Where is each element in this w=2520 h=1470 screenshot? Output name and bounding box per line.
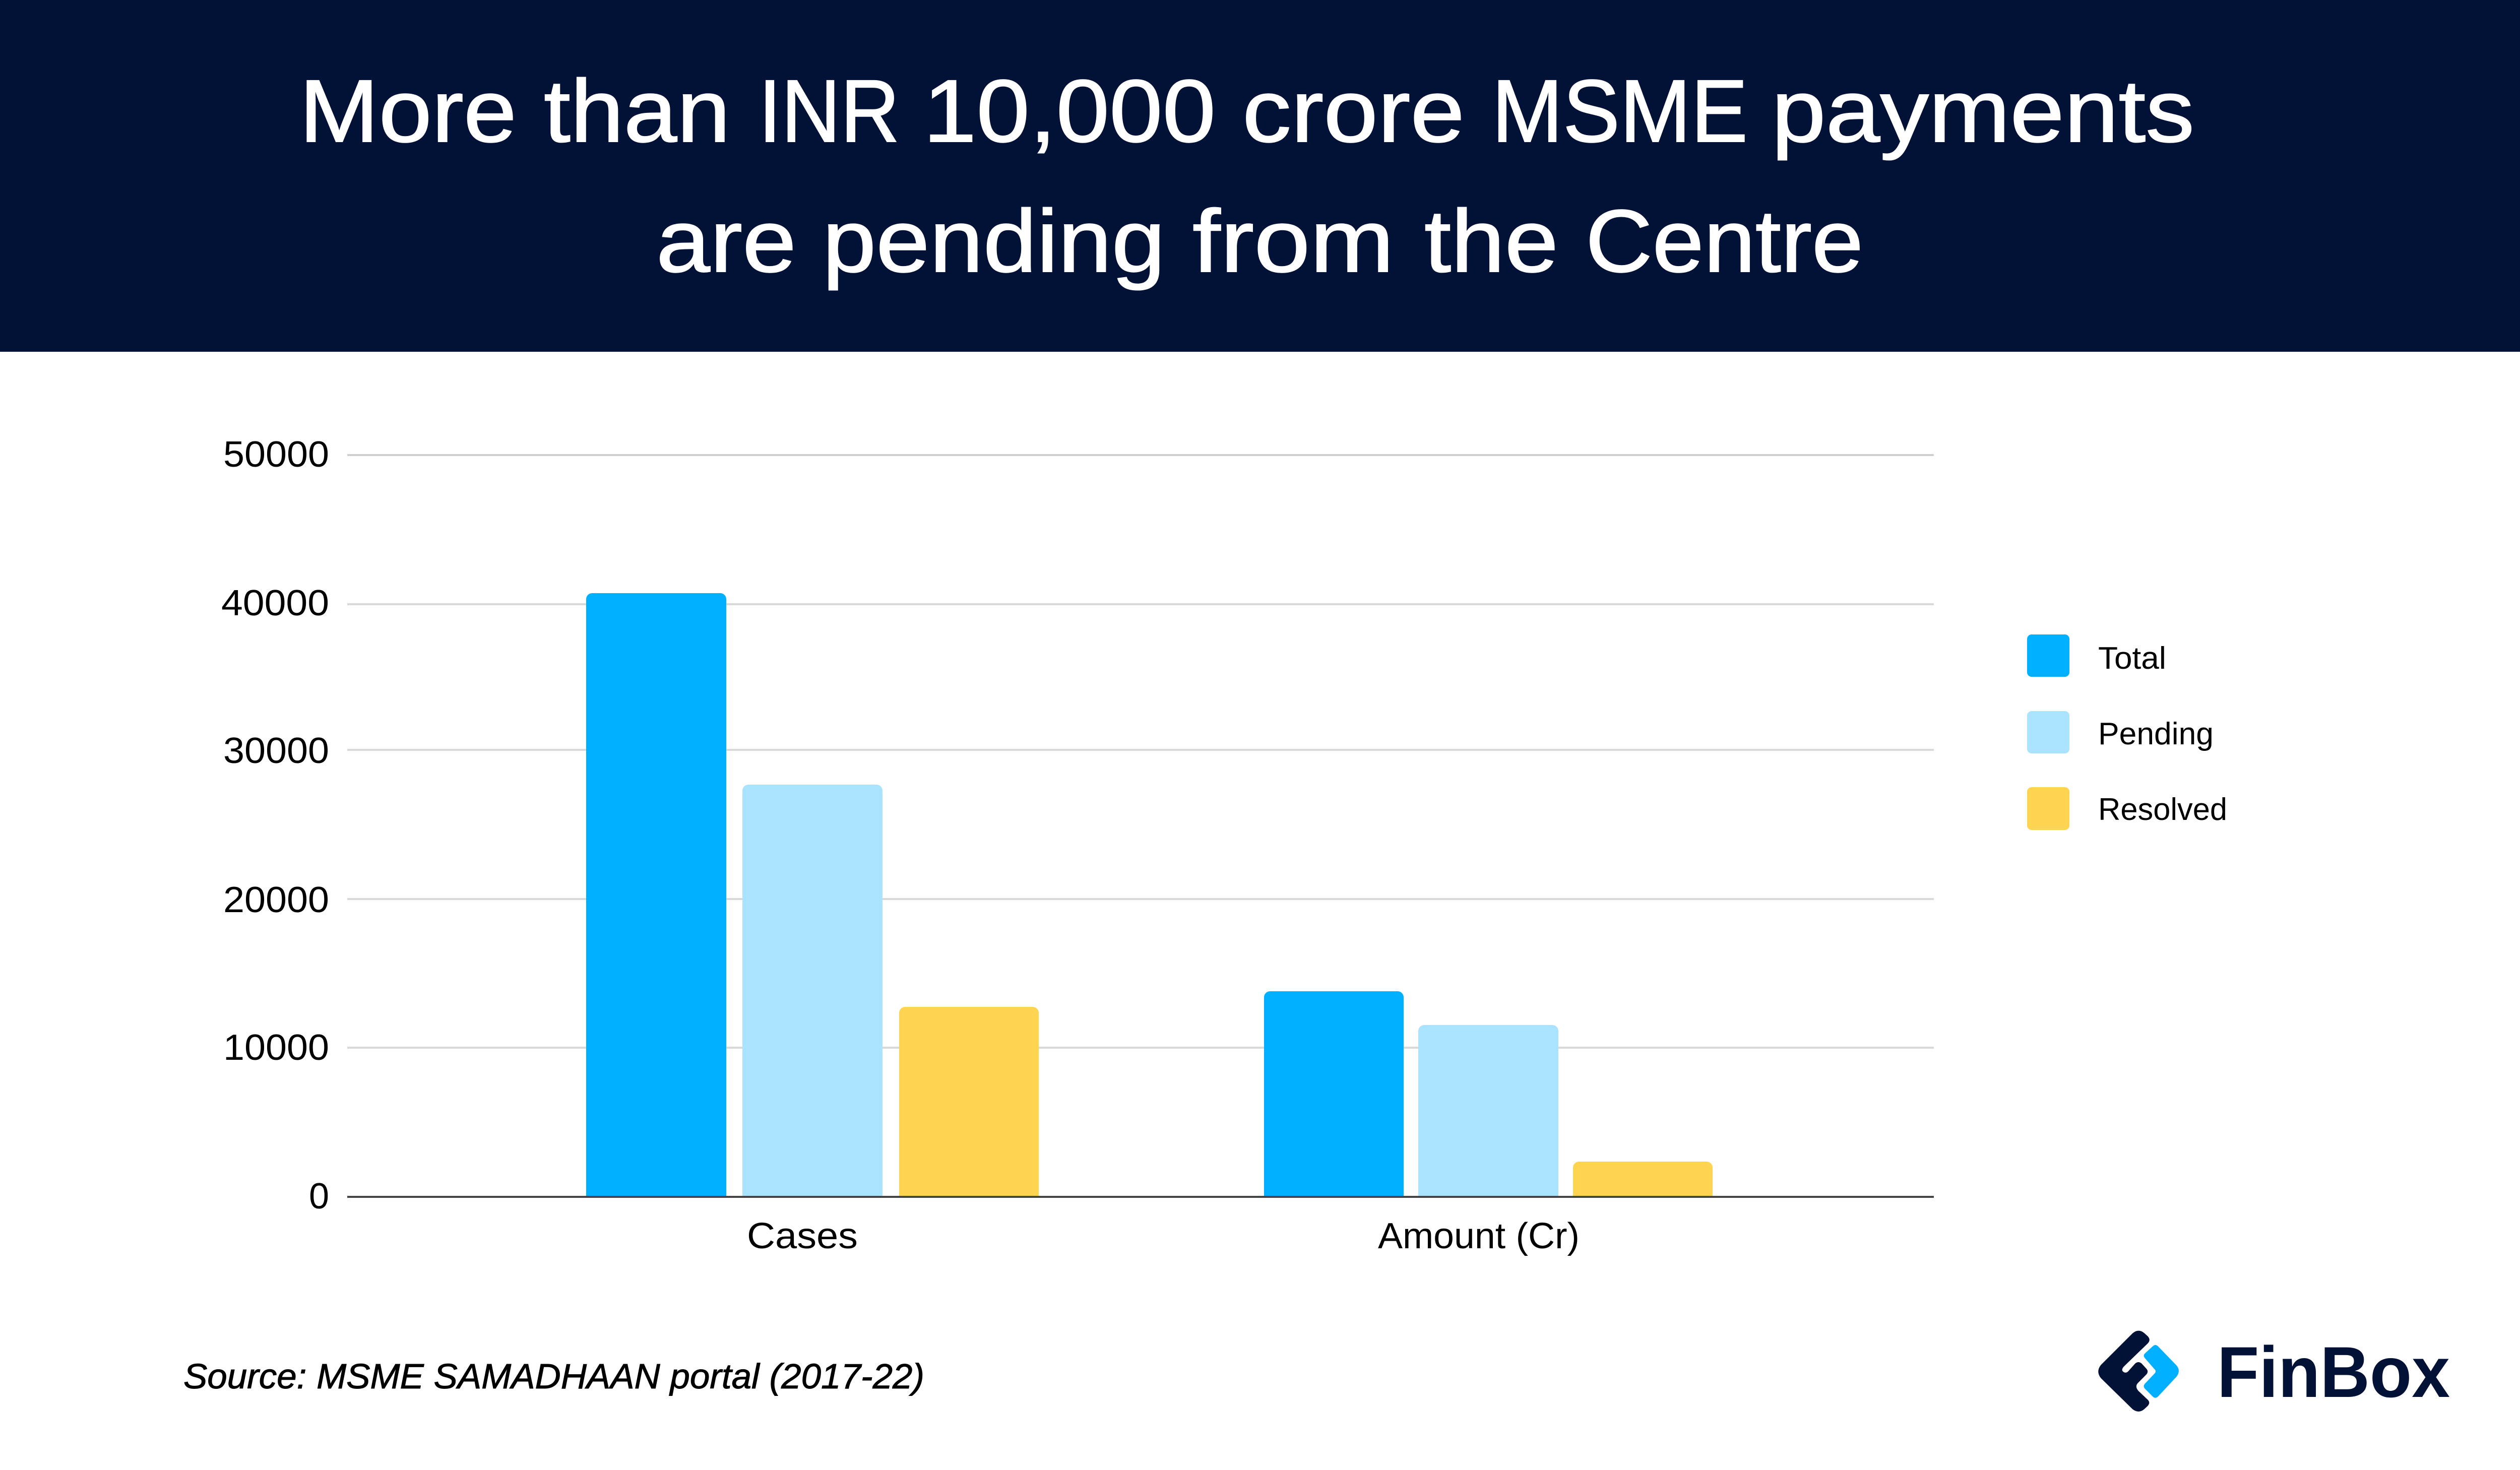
y axis labels: 30000 bbox=[223, 731, 329, 771]
legend item: Total: Total bbox=[2098, 641, 2166, 676]
legend bbox=[2027, 634, 2227, 830]
legend item: Pending bbox=[2027, 711, 2214, 753]
bars: Cases bbox=[586, 593, 1039, 1196]
title: INR bbox=[759, 62, 900, 161]
bar chart bbox=[221, 434, 1934, 1256]
title: are bbox=[656, 192, 796, 291]
title: 10,000 bbox=[923, 62, 1216, 161]
legend item: Resolved: Resolved bbox=[2098, 792, 2227, 827]
legend item: Pending: Pending bbox=[2098, 717, 2214, 751]
wordmark: FinBox bbox=[2217, 1332, 2450, 1413]
title: pending bbox=[823, 192, 1165, 291]
y axis labels: 20000 bbox=[223, 880, 329, 920]
legend item: Total bbox=[2027, 634, 2166, 677]
title: MSME bbox=[1492, 62, 1748, 161]
bars: Amount (Cr) bbox=[1264, 991, 1713, 1196]
y axis labels: 0 bbox=[309, 1176, 329, 1217]
title: payments bbox=[1772, 62, 2194, 161]
x axis label: Amount (Cr): Amount (Cr) bbox=[1378, 1216, 1580, 1256]
title: Centre bbox=[1586, 192, 1863, 291]
header band bbox=[0, 0, 2520, 352]
y axis labels bbox=[221, 434, 329, 1217]
title bbox=[299, 62, 2194, 291]
icon: FinBox mark bbox=[2098, 1331, 2179, 1412]
y axis labels: 50000 bbox=[223, 434, 329, 475]
title: the bbox=[1424, 192, 1558, 291]
title: More bbox=[299, 62, 517, 161]
title: crore bbox=[1242, 62, 1465, 161]
y axis labels: 10000 bbox=[223, 1028, 329, 1068]
logo: FinBox bbox=[2098, 1331, 2450, 1413]
title: from bbox=[1192, 192, 1394, 291]
x axis label: Cases: Cases bbox=[747, 1216, 858, 1256]
title: than bbox=[544, 62, 730, 161]
legend item: Resolved bbox=[2027, 787, 2227, 830]
y axis labels: 40000 bbox=[221, 583, 329, 623]
source note: Source: MSME SAMADHAAN portal (2017-22) bbox=[183, 1357, 924, 1396]
